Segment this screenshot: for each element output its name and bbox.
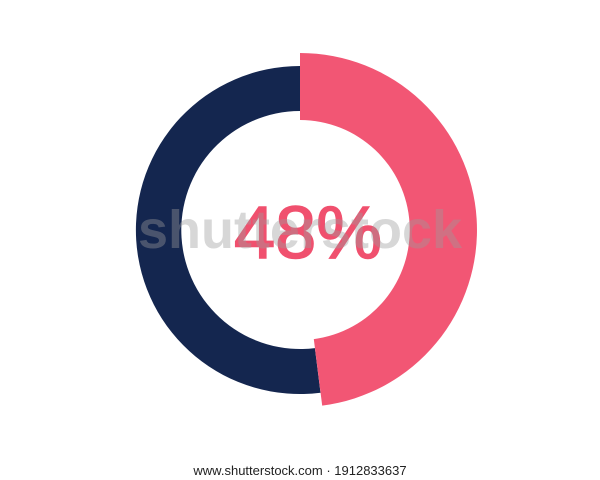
navy segment 52% <box>136 66 320 394</box>
footer text: www.shutterstock.com · 1912833637 <box>192 463 407 478</box>
percentage label: 48% <box>234 191 382 274</box>
pink segment 48% <box>300 53 477 406</box>
watermark: shutterstock <box>138 200 463 260</box>
